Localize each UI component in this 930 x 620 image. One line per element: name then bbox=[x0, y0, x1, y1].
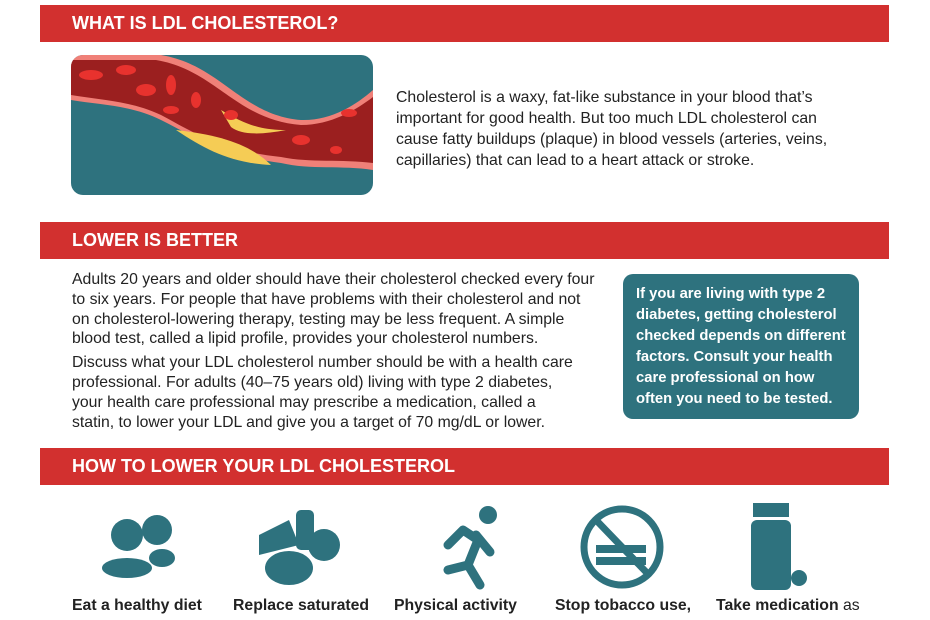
body text: Adults 20 years and older should have their cholesterol checked every four bbox=[72, 271, 594, 288]
callout: care professional on how bbox=[636, 370, 814, 386]
text: Take medication as bbox=[716, 597, 860, 614]
callout: checked depends on different bbox=[636, 328, 846, 344]
body text: professional. For adults (40–75 years old) living with type 2 diabetes, bbox=[72, 374, 552, 391]
body text: to six years. For people that have problems with their cholesterol and not bbox=[72, 291, 580, 308]
header: what is LDL bbox=[40, 5, 889, 42]
body text: your health care professional may prescribe a medication, called a bbox=[72, 394, 536, 411]
intro text: Cholesterol is a waxy, fat-like substance in your blood that’s bbox=[396, 89, 812, 106]
callout bbox=[623, 274, 859, 419]
body text: on cholesterol-lowering therapy, testing may be less frequent. A simple bbox=[72, 311, 564, 328]
header: how to lower bbox=[40, 448, 889, 485]
artery illustration bbox=[71, 55, 373, 195]
header: lower is better: LOWER IS BETTER bbox=[72, 230, 238, 250]
header: what is LDL: WHAT IS LDL CHOLESTEROL? bbox=[72, 13, 338, 33]
body text: blood test, called a lipid profile, provides your cholesterol numbers. Discuss what your LDL cholesterol number should be with a health care bbox=[72, 330, 573, 371]
text: Stop tobacco use, bbox=[555, 597, 691, 614]
icon: running bbox=[443, 506, 497, 590]
icon: medication bbox=[751, 503, 807, 590]
callout: often you need to be tested. bbox=[636, 391, 832, 407]
intro text: important for good health. But too much LDL cholesterol can bbox=[396, 110, 817, 127]
intro text: capillaries) that can lead to a heart attack or stroke. bbox=[396, 152, 754, 169]
icon: food bbox=[102, 515, 175, 578]
header: lower is better bbox=[40, 222, 889, 259]
intro text: cause fatty buildups (plaque) in blood vessels (arteries, veins, bbox=[396, 131, 827, 148]
intro text bbox=[396, 89, 827, 169]
labels: Eat a healthy diet bbox=[72, 597, 202, 614]
callout: If you are living with type 2 bbox=[636, 286, 825, 302]
callout: factors. Consult your health bbox=[636, 349, 832, 365]
body text bbox=[72, 271, 594, 431]
icon: saturated fat foods bbox=[259, 510, 340, 585]
text: Physical activity bbox=[394, 597, 517, 614]
text: Replace saturated bbox=[233, 597, 369, 614]
body text: statin, to lower your LDL and give you a target of 70 mg/dL or lower. bbox=[72, 414, 545, 431]
header: how to lower: HOW TO LOWER YOUR LDL CHOLESTEROL bbox=[72, 456, 455, 476]
callout: diabetes, getting cholesterol bbox=[636, 307, 837, 323]
icon: no smoking bbox=[580, 506, 664, 588]
